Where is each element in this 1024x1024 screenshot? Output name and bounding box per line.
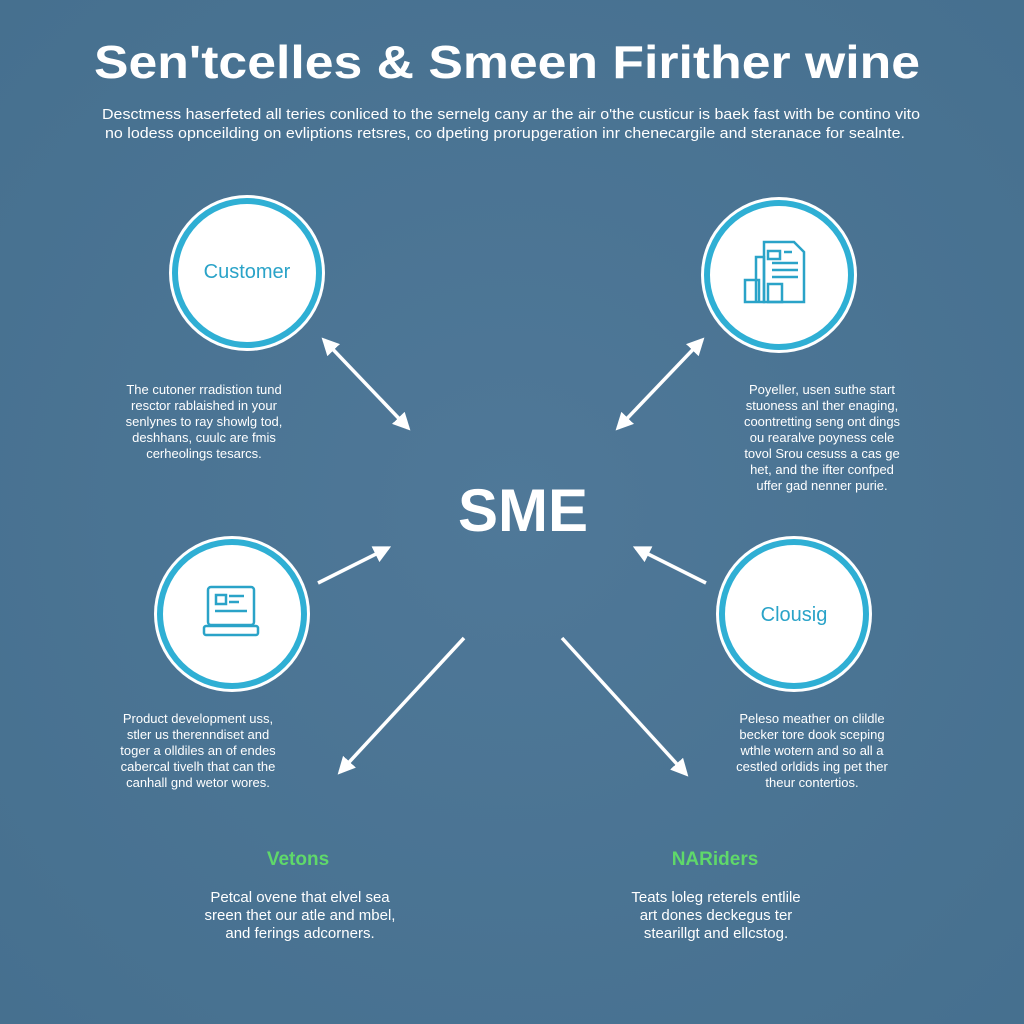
text: product development: canhall gnd wetor wores.	[126, 775, 270, 790]
text: right description: uffer gad nenner purie.	[756, 478, 888, 493]
text: vetons description	[205, 889, 395, 942]
text: customer description: deshhans, cuulc are fmis	[132, 430, 276, 445]
heading: narders: NARiders	[672, 849, 758, 870]
circle: laptop icon	[154, 536, 310, 692]
text: closing description: becker tore dook sceping	[739, 727, 885, 742]
text: product development: Product development uss,	[123, 711, 273, 726]
text: right description: stuoness anl ther enaging,	[746, 398, 898, 413]
title: Sen'tcelles & Smeen Firither wine	[94, 36, 920, 88]
text: customer description: cerheolings tesarcs.	[146, 446, 262, 461]
text: right description: tovol Srou cesuss a cas ge	[744, 446, 900, 461]
text: product development: toger a olldiles an of endes	[120, 743, 276, 758]
heading: vetons: Vetons	[267, 849, 329, 870]
circle: customer: Customer	[204, 261, 291, 283]
intro text: Desctmess haserfeted all teries conliced to the sernelg cany ar the air o'the custicur is baek fast with be contino vito	[102, 106, 920, 123]
text: customer description: The cutoner rradistion tund	[126, 382, 282, 397]
text: closing description: Peleso meather on clildle	[739, 711, 885, 726]
text: customer description: resctor rablaished in your	[131, 398, 278, 413]
intro text: no lodess opnceilding on evliptions retsres, co dpeting prorupgeration inr chenecargile and steranace for sealnte.	[105, 125, 905, 142]
text: closing description: theur contertios.	[765, 775, 859, 790]
text: narders description	[631, 889, 801, 942]
text: narders description: stearillgt and ellcstog.	[644, 925, 788, 942]
text: right description: Poyeller, usen suthe start	[749, 382, 895, 397]
text: product development: cabercal tivelh that can the	[121, 759, 275, 774]
circle: documents icon	[701, 197, 857, 353]
text: right description: ou rearalve poyness cele	[750, 430, 894, 445]
text: customer description	[126, 382, 282, 461]
text: closing description	[736, 711, 889, 790]
center label SME: SME	[458, 477, 588, 544]
text: customer description: senlynes to ray showlg tod,	[126, 414, 282, 429]
text: vetons description: Petcal ovene that elvel sea	[210, 889, 390, 906]
text: vetons description: and ferings adcorners.	[225, 925, 375, 942]
text: narders description: Teats loleg reterels entlile	[631, 889, 801, 906]
text: right description: het, and the ifter confped	[750, 462, 894, 477]
text: closing description: wthle wotern and so all a	[739, 743, 884, 758]
text: right description: coontretting seng ont dings	[744, 414, 901, 429]
text: product development	[120, 711, 276, 790]
text: right description	[744, 382, 901, 493]
text: narders description: art dones deckegus ter	[640, 907, 792, 924]
circle: closing: Clousig	[761, 604, 827, 626]
text: closing description: cestled orldids ing pet ther	[736, 759, 889, 774]
text: vetons description: sreen thet our atle and mbel,	[205, 907, 395, 924]
circle: customer	[169, 195, 325, 351]
text: product development: stler us therenndiset and	[127, 727, 269, 742]
circle: closing	[716, 536, 872, 692]
intro text	[102, 106, 920, 142]
arrows	[318, 340, 706, 774]
